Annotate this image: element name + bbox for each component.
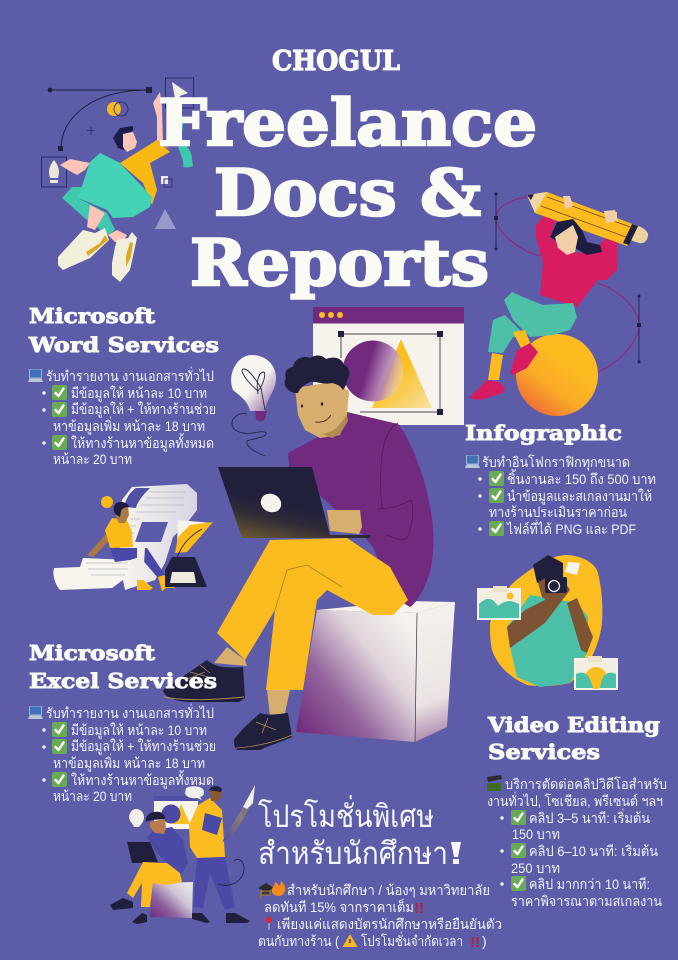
- text block: Video pricing list: บริการตัดต่อคลิปวิดีโอสำหรับ: [505, 776, 667, 792]
- text block: Video pricing list: 150 บาท: [512, 826, 560, 842]
- text block: Excel pricing list: รับทำรายงาน งานเอกสารทั่วไป: [46, 704, 214, 721]
- illustration: light bulb: [231, 355, 276, 456]
- heading: student promotion: โปรโมชั่นพิเศษ: [258, 795, 434, 834]
- text block: Word pricing list: หาข้อมูลเพิ่ม หน้าละ 18 บาท: [53, 417, 205, 435]
- heading: Microsoft Excel Services: [29, 641, 217, 693]
- heading: Microsoft Word Services: Word Services: [28, 333, 219, 357]
- heading: Microsoft Excel Services: Microsoft: [29, 641, 156, 665]
- text block: Infographic pricing list: รับทำอินโฟกราฟิกทุกขนาด: [482, 454, 630, 471]
- text block: Infographic pricing list: นำข้อมูลและสเกลงานมาให้: [507, 488, 652, 505]
- text block: Video pricing list: [487, 775, 667, 909]
- text block: Excel pricing list: มีข้อมูลให้ หน้าละ 10 บาท: [71, 722, 207, 739]
- panel: Infographic service: [465, 421, 656, 537]
- text block: promotion details: ลดทันที 15% จากราคาเต็ม: [264, 898, 414, 915]
- text block: promotion details: ตนกับทางร้าน (: [258, 933, 339, 949]
- title: brand name: CHOGUL: [272, 46, 400, 77]
- title: Freelance Docs & Reports: Freelance: [158, 86, 537, 161]
- illustration: photographer: [477, 555, 618, 690]
- heading: Microsoft Excel Services: Excel Services: [29, 669, 217, 693]
- heading: Video Editing Services: Services: [488, 740, 600, 764]
- text block: Word pricing list: [28, 367, 216, 467]
- text block: Word pricing list: มีข้อมูลให้ หน้าละ 10 บาท: [71, 385, 207, 402]
- text block: Excel pricing list: ให้ทางร้านหาข้อมูลทั้งหมด: [71, 770, 214, 789]
- text block: Infographic pricing list: ไฟล์ที่ได้ PNG และ PDF: [506, 520, 636, 537]
- text block: promotion details: ): [482, 933, 487, 949]
- text block: Video pricing list: คลิป 3–5 นาที: เริ่มต้น: [529, 809, 650, 826]
- heading: Video Editing Services: [487, 713, 660, 764]
- text block: promotion details: เพียงแค่แสดงบัตรนักศึกษาหรือยืนยันตัว: [277, 916, 502, 932]
- text block: Excel pricing list: หน้าละ 20 บาท: [53, 788, 132, 804]
- text block: promotion details: !!: [470, 934, 480, 951]
- text block: Word pricing list: หน้าละ 20 บาท: [53, 451, 132, 467]
- illustration: design window: [313, 307, 464, 425]
- heading: Video Editing Services: Video Editing: [487, 713, 660, 737]
- panel: Video editing service: [487, 713, 667, 909]
- text block: Word pricing list: มีข้อมูลให้ + ให้ทางร้านช่วย: [71, 401, 216, 418]
- text block: promotion details: !!: [414, 900, 424, 917]
- title: Freelance Docs & Reports: [158, 86, 537, 301]
- text block: Video pricing list: ราคาพิจารณาตามสเกลงาน: [511, 893, 662, 909]
- title: Freelance Docs & Reports: Docs &: [214, 156, 481, 231]
- heading: Microsoft Word Services: Microsoft: [29, 304, 156, 328]
- panel: Microsoft Excel services: [28, 641, 217, 804]
- text block: Excel pricing list: มีข้อมูลให้ + ให้ทางร้านช่วย: [71, 738, 216, 755]
- title: Freelance Docs & Reports: Reports: [190, 226, 489, 301]
- text block: promotion details: [258, 881, 502, 951]
- heading: student promotion: [258, 795, 461, 871]
- heading: student promotion: สำหรับนักศึกษา: [258, 836, 448, 871]
- text block: Excel pricing list: [28, 704, 216, 804]
- illustration: floating designer with pen tool: [42, 78, 194, 282]
- text block: Video pricing list: คลิป 6–10 นาที: เริ่มต้น: [529, 842, 658, 859]
- text block: promotion details: สำหรับนักศึกษา / น้องๆ มหาวิทยาลัย: [287, 882, 490, 898]
- text block: Word pricing list: ให้ทางร้านหาข้อมูลทั้งหมด: [71, 433, 214, 452]
- text block: Excel pricing list: หาข้อมูลเพิ่ม หน้าละ 18 บาท: [53, 754, 205, 772]
- text block: promotion details: โปรโมชั่นจำกัดเวลา: [361, 932, 463, 949]
- illustration: man on laptop sitting on box: [163, 355, 455, 750]
- heading: Infographic: Infographic: [465, 421, 622, 445]
- panel: student promotion: [258, 795, 502, 951]
- heading: Microsoft Word Services: [28, 304, 219, 357]
- illustration: students with laptop and pen: [110, 785, 255, 924]
- text block: Infographic pricing list: ชิ้นงานละ 150 ถึง 500 บาท: [507, 469, 656, 487]
- text block: Infographic pricing list: [465, 454, 656, 537]
- text block: Infographic pricing list: ทางร้านประเมินราคาก่อน: [489, 504, 627, 520]
- text block: Word pricing list: รับทำรายงาน งานเอกสารทั่วไป: [46, 367, 214, 384]
- illustration: woman with giant pencil on ball: [469, 192, 648, 416]
- text block: Video pricing list: คลิป มากกว่า 10 นาที:: [529, 876, 650, 892]
- panel: Microsoft Word services: [28, 304, 219, 467]
- text block: Video pricing list: 250 บาท: [511, 860, 560, 876]
- illustration: woman on paper scroll with quill: [53, 484, 213, 591]
